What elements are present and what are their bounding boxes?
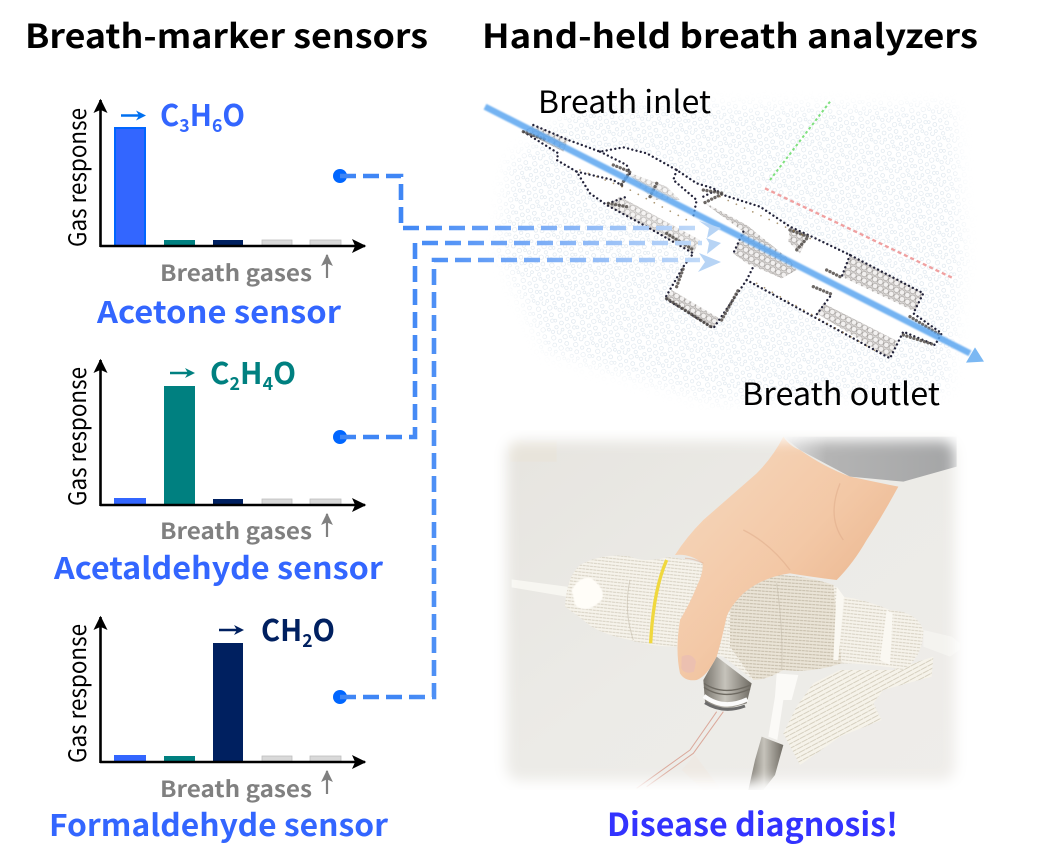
label: C2H4O formula: 2 <box>230 370 240 396</box>
dashed path <box>340 243 702 437</box>
arrow: gray up <box>326 514 328 537</box>
panel: formaldehyde sensor chart <box>49 606 389 845</box>
dashed path <box>340 176 700 228</box>
label: C2H4O formula: 4 <box>263 370 273 396</box>
chart axes <box>100 100 365 247</box>
label: C3H6O formula: H <box>190 91 212 135</box>
bar chart: acetone bars <box>115 128 341 246</box>
top-left wrapped thing <box>507 440 557 462</box>
label: breath inlet: Breath inlet <box>538 77 711 122</box>
connector: acetone sensor to device <box>333 169 721 238</box>
label: C3H6O formula: 6 <box>212 112 222 138</box>
hand creases <box>685 483 843 570</box>
folds <box>627 580 782 670</box>
inlet tube <box>512 580 568 596</box>
analyzer wrap <box>565 556 923 680</box>
label: C3H6O formula: C <box>160 91 180 135</box>
label: CH2O formula: O <box>313 606 335 650</box>
label: C3H6O formula: 3 <box>179 112 190 138</box>
axis: red <box>765 188 953 278</box>
arrowhead <box>699 221 721 238</box>
connector: formaldehyde sensor to device <box>333 253 721 704</box>
axis label: breath gases: Breath gases <box>160 514 312 546</box>
photo background <box>490 430 970 790</box>
point cloud background <box>496 100 970 406</box>
label: CH2O formula: CH <box>261 606 303 650</box>
panel: acetone sensor chart <box>58 91 365 332</box>
outlet tube <box>923 630 960 657</box>
inlet opening <box>572 578 603 609</box>
axis label: gas response: Gas response <box>58 108 93 247</box>
wires <box>637 712 723 788</box>
connector: acetaldehyde sensor to device <box>333 238 721 444</box>
label: C2H4O formula: H <box>240 349 263 393</box>
axis: green <box>770 102 830 180</box>
device diagram: point cloud analyzer <box>480 90 1000 410</box>
label: C2H4O formula: O <box>273 349 296 393</box>
white collars <box>833 587 844 660</box>
ribbon cable <box>682 755 720 790</box>
teflon fitting <box>768 673 798 740</box>
dot <box>333 169 347 183</box>
chart axes <box>100 360 365 506</box>
arrow: to formaldehyde bar <box>219 625 244 635</box>
arrow: gray up <box>326 255 328 278</box>
metal connector <box>703 657 752 710</box>
arrow: to acetaldehyde bar <box>170 368 195 378</box>
arrow: gray up <box>326 771 328 794</box>
axis label: breath gases: Breath gases <box>160 256 312 288</box>
dot <box>333 430 347 444</box>
panel: acetaldehyde sensor chart <box>53 349 384 588</box>
chart axes <box>100 617 365 763</box>
arrowhead <box>706 238 721 254</box>
steel fitting <box>748 737 783 790</box>
sensor name: acetaldehyde: Acetaldehyde sensor <box>53 544 384 588</box>
dot <box>333 690 347 704</box>
dashed path <box>340 260 700 697</box>
label: C2H4O formula: C <box>210 349 230 393</box>
photo: hand holding analyzer <box>490 430 970 790</box>
bar chart: formaldehyde bars <box>114 643 341 762</box>
sensor name: formaldehyde: Formaldehyde sensor <box>49 801 389 845</box>
yellow band <box>651 560 667 643</box>
hand <box>675 437 898 680</box>
label: C3H6O formula: O <box>222 91 245 135</box>
frayed wrap <box>783 657 933 765</box>
arrowhead <box>698 253 721 272</box>
label: CH2O formula: 2 <box>302 627 313 653</box>
label: breath outlet: Breath outlet <box>742 369 940 414</box>
sleeve <box>783 437 957 482</box>
thumbnail <box>681 655 696 673</box>
axis label: breath gases: Breath gases <box>160 772 312 804</box>
title: hand-held breath analyzers: Hand-held breath analyzers <box>482 10 978 58</box>
axis label: gas response: Gas response <box>58 367 93 506</box>
bar chart: acetaldehyde bars <box>114 386 341 505</box>
title: breath-marker sensors: Breath-marker sensors <box>25 10 428 58</box>
arrow: to acetone bar <box>121 110 146 120</box>
arrow: breath flow <box>485 107 984 363</box>
analyzer body <box>523 125 942 358</box>
axis label: gas response: Gas response <box>58 624 93 763</box>
caption: disease diagnosis: Disease diagnosis! <box>607 800 898 846</box>
sensor name: acetone: Acetone sensor <box>96 288 342 332</box>
